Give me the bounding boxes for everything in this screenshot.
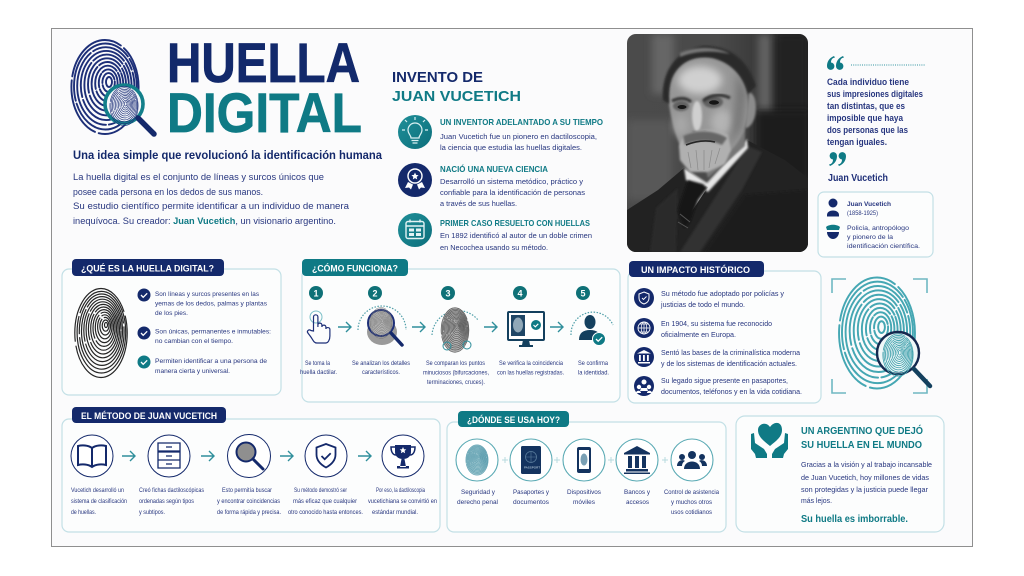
info box [818,192,933,257]
captions: ordenadas según tipos [139,499,194,505]
title [167,31,362,144]
item: inventor adelantado: UN INVENTOR ADELANTADO A SU TIEMPO [440,117,603,127]
icon: person confirmed [571,312,613,346]
portrait photo [627,34,810,252]
captions: huella dactilar. [300,370,337,376]
captions [300,361,609,386]
panel: impacto historico: Sentó las bases de la criminalística moderna [661,348,801,357]
captions: Creó fichas dactiloscópicas [139,488,204,494]
panel: metodo de juan vucetich: EL MÉTODO DE JUAN VUCETICH [81,410,217,421]
icon: hand [307,311,330,343]
panel: que es la huella digital: yemas de los dedos, palmas y plantas [155,300,268,308]
captions: Se confirma [578,361,609,367]
hair [663,46,756,104]
title: HUELLA [167,31,360,94]
item: primer caso: PRIMER CASO RESUELTO CON HUELLAS [440,218,590,228]
panel: un argentino que dejo su huella: son protegidas y la justicia puede llegar [801,485,929,494]
intro text: inequívoca. Su creador: Juan Vucetich, un visionario argentino. [73,216,336,227]
panel: que es la huella digital [62,259,281,395]
panel: como funciona: 5 [580,288,586,298]
quote: imposible que haya [827,113,903,123]
quote: tan distintas, que es [827,101,905,111]
captions: Se toma la [305,361,331,367]
quote: sus impresiones digitales [827,89,923,99]
quote: Cada individuo tiene [827,77,909,87]
panel: metodo de juan vucetich [62,407,440,532]
captions: móviles [573,499,596,506]
icon: monitor [508,312,544,347]
captions: sistema de clasificación [71,499,127,505]
panel: donde se usa hoy: ¿DÓNDE SE USA HOY? [467,414,560,425]
eyes and brows [673,101,689,111]
captions: Se comparan los puntos [426,361,485,367]
panel: que es la huella digital: Son únicas, permanentes e inmutables: [155,328,271,336]
captions: accesos [626,499,650,506]
panel: como funciona: 2 [372,288,378,298]
item: nueva ciencia: confiable para la identificación de personas [440,188,585,197]
captions: con las huellas registradas. [497,370,564,376]
panel: como funciona: ¿CÓMO FUNCIONA? [312,262,398,274]
icon: trophy [391,445,415,468]
info box: Juan Vucetich [847,201,891,208]
icon: mobile [577,447,591,473]
heading: invento: JUAN VUCETICH [392,88,521,105]
captions: más eficaz que cualquier [293,499,357,505]
quote [827,56,925,184]
item: primer caso: En 1892 identificó al autor de un doble crimen [440,231,592,240]
icon: group [677,451,707,469]
info box: (1858-1925) [847,210,878,217]
captions: derecho penal [457,499,499,506]
panel: como funciona: 4 [518,288,523,298]
panel: impacto historico [628,261,821,403]
captions: y muchos otros [671,499,713,506]
panel: impacto historico: UN IMPACTO HISTÓRICO [641,264,750,275]
item: inventor adelantado [398,115,603,152]
captions: Seguridad y [461,489,496,496]
intro text: La huella digital es el conjunto de líneas y surcos únicos que [73,172,324,183]
intro text: posee cada persona en los dedos de sus manos. [73,187,263,198]
item: nueva ciencia: NACIÓ UNA NUEVA CIENCIA [440,163,548,174]
captions: Por eso, la dactiloscopia [376,488,425,494]
captions: usos cotidianos [671,509,713,516]
captions: vucetichiana se convirtió en [368,499,437,505]
captions: característicos. [362,370,400,376]
panel: como funciona: 3 [446,288,451,298]
captions: y encontrar coincidencias [217,499,280,505]
panel: que es la huella digital: Permiten identificar a una persona de [155,358,267,365]
panel: que es la huella digital: ¿QUÉ ES LA HUELLA DIGITAL? [81,262,214,274]
captions: otro conocido hasta entonces. [288,510,363,516]
panel: un argentino que dejo su huella: Gracias a la visión y al trabajo incansable [801,460,932,469]
panel: impacto historico: Su método fue adoptado por policías y [661,289,784,298]
item: nueva ciencia: a través de sus huellas. [440,199,517,208]
icon: magnifier on fingerprint [358,306,406,345]
info box: Policía, antropólogo [847,225,909,232]
info box: identificación científica. [847,243,920,250]
icon: teal fingerprint [466,444,488,476]
beard and moustache [679,130,731,172]
item: inventor adelantado: la ciencia que estudia las huellas digitales. [440,143,582,152]
captions [457,489,719,516]
panel: impacto historico: Su legado sigue presente en pasaportes, [661,376,788,385]
quote: Juan Vucetich [828,173,888,184]
panel: que es la huella digital: de los pies. [155,310,188,317]
captions: Bancos y [624,489,651,496]
subtitle: Una idea simple que revolucionó la identificación humana [73,148,382,162]
item: primer caso [398,213,592,252]
panel: como funciona [300,259,620,402]
panel: impacto historico: oficialmente en Europa. [661,330,736,339]
captions: documentos [513,499,550,506]
panel: impacto historico: y de los sistemas de identificación actuales. [661,359,797,368]
captions: de forma rápida y precisa. [217,510,281,516]
icon: bank [624,446,650,474]
icon: shield [316,444,336,468]
neck [700,128,745,178]
icon: book [78,445,106,467]
item: primer caso: en Necochea usando su método. [440,243,548,252]
title: DIGITAL [167,81,362,144]
captions: Vucetich desarrolló un [71,488,124,494]
icon: fingerprint comparison [432,308,478,352]
quote: dos personas que las [827,125,908,135]
panel: como funciona: 1 [314,288,319,298]
captions: terminaciones, cruces). [427,380,485,386]
icon: fingerprint with magnifier [71,40,154,134]
panel: impacto historico: justicias de todo el mundo. [660,300,745,309]
panel: un argentino que dejo su huella [736,416,944,532]
arrows [338,322,563,332]
panel: un argentino que dejo su huella: SU HUELLA EN EL MUNDO [801,440,922,451]
captions: de huellas. [71,510,96,516]
face [668,56,748,150]
intro text [73,172,350,227]
panel: un argentino que dejo su huella: más lejos. [801,496,832,505]
item: nueva ciencia [398,163,585,208]
panel: que es la huella digital: no cambian con el tiempo. [155,338,233,345]
panel: un argentino que dejo su huella: Su huella es imborrable. [801,514,908,525]
captions: minuciosos (bifurcaciones, [423,370,489,376]
shirt, collar and tie [684,139,748,192]
quote: tengan iguales. [827,137,887,147]
icon: passport: PASSPORT [524,466,540,470]
captions: Esto permitía buscar [222,488,272,494]
captions: Pasaportes y [513,489,550,496]
captions: Se analizan los detalles [352,361,410,367]
intro text: Su estudio científico permite identificar a un individuo de manera [73,201,350,212]
icon: teal fingerprint with magnifier [832,278,930,393]
arrows [122,451,371,461]
panel: impacto historico: En 1904, su sistema fue reconocido [661,319,772,328]
icon: passport [521,446,541,474]
icon: drawers [158,443,180,468]
captions: estándar mundial. [372,510,418,516]
icon: magnifier [236,442,263,469]
panel: impacto historico: documentos, teléfonos y en la vida cotidiana. [661,387,802,396]
panel: un argentino que dejo su huella: de Juan Vucetich, hoy millones de vidas [801,473,929,482]
icon: hands and heart [751,423,788,458]
captions: la identidad. [578,370,609,376]
captions: y subtipos. [139,510,165,516]
captions: Se verifica la coincidencia [499,361,564,367]
item: nueva ciencia: Desarrolló un sistema metódico, práctico y [440,177,583,186]
coat [627,140,808,252]
heading: invento: INVENTO DE [392,69,483,86]
panel: que es la huella digital: manera cierta y universal. [155,368,230,375]
captions: Dispositivos [567,489,602,496]
captions: Su método demostró ser [294,488,347,494]
heading: invento [392,69,521,105]
panel: que es la huella digital: Son líneas y surcos presentes en las [155,291,260,298]
captions [71,488,437,516]
item: inventor adelantado: Juan Vucetich fue un pionero en dactiloscopia, [440,132,597,141]
info box: y pionero de la [847,234,893,241]
captions: Control de asistencia [664,489,719,496]
panel: donde se usa hoy [447,411,726,532]
panel: un argentino que dejo su huella: UN ARGENTINO QUE DEJÓ [801,424,923,437]
